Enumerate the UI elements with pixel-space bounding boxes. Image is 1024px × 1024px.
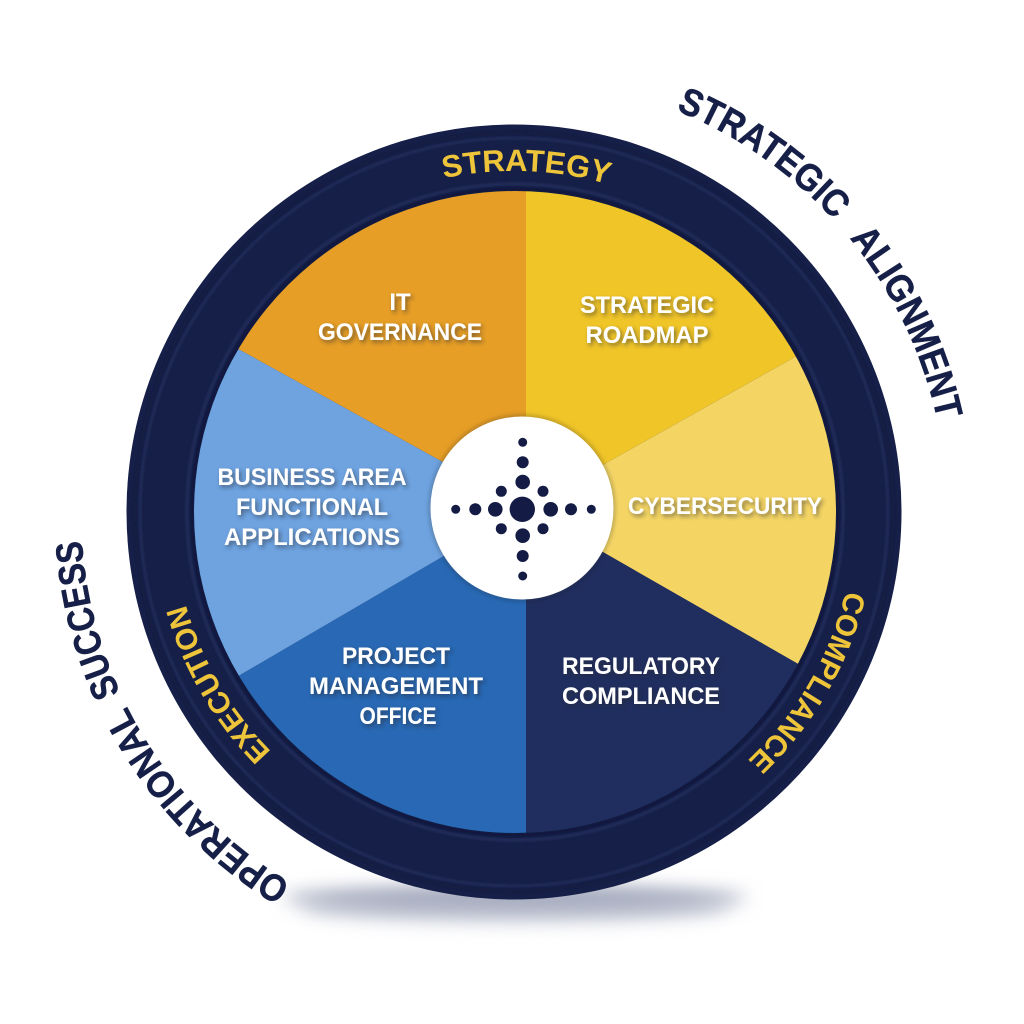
segment: project management office	[238, 556, 526, 833]
center hub	[430, 416, 614, 600]
icon: dotted compass star	[451, 438, 596, 580]
outer navy ring	[126, 124, 902, 900]
ring label: COMPLIANCE: COMPLIANCE	[748, 594, 864, 774]
label: IT governance: GOVERNANCE	[318, 319, 482, 346]
segment: regulatory compliance	[526, 552, 798, 833]
segment: strategic roadmap	[526, 191, 796, 465]
label: business area functional applications: BUSINESS AREA	[218, 464, 406, 491]
ground shadow	[283, 886, 747, 922]
outer label: strategic alignment: STRATEGIC	[679, 88, 849, 216]
label: project management office: OFFICE	[360, 703, 436, 730]
label: IT governance: IT	[389, 289, 411, 316]
outer label: strategic alignment: ALIGNMENT	[850, 229, 963, 415]
segment: business area functional applications	[194, 349, 444, 676]
label: strategic roadmap	[580, 292, 714, 349]
label: regulatory compliance: REGULATORY	[562, 653, 720, 680]
label: business area functional applications	[218, 464, 406, 551]
label: IT governance	[318, 289, 482, 346]
label: project management office: MANAGEMENT	[309, 673, 483, 700]
ring label: STRATEGY: STRATEGY	[442, 150, 613, 182]
outer label: strategic alignment	[679, 88, 963, 415]
label: project management office	[309, 643, 483, 730]
label: regulatory compliance	[562, 653, 720, 710]
label: business area functional applications: FUNCTIONAL	[236, 494, 388, 521]
ring label: EXECUTION: EXECUTION	[166, 606, 270, 764]
label: cybersecurity: CYBERSECURITY	[628, 493, 822, 520]
outer label: operational success: OPERATIONAL	[110, 706, 286, 901]
label: strategic roadmap: STRATEGIC	[580, 292, 714, 319]
outer label: operational success: SUCCESS	[56, 542, 118, 700]
segment: IT governance	[238, 191, 526, 462]
label: regulatory compliance: COMPLIANCE	[562, 683, 720, 710]
pie chart segments	[194, 191, 836, 833]
label: project management office: PROJECT	[342, 643, 450, 670]
outer label: operational success	[56, 542, 286, 901]
segment: cybersecurity	[602, 356, 836, 664]
label: business area functional applications: APPLICATIONS	[224, 524, 400, 551]
label: strategic roadmap: ROADMAP	[586, 322, 708, 349]
